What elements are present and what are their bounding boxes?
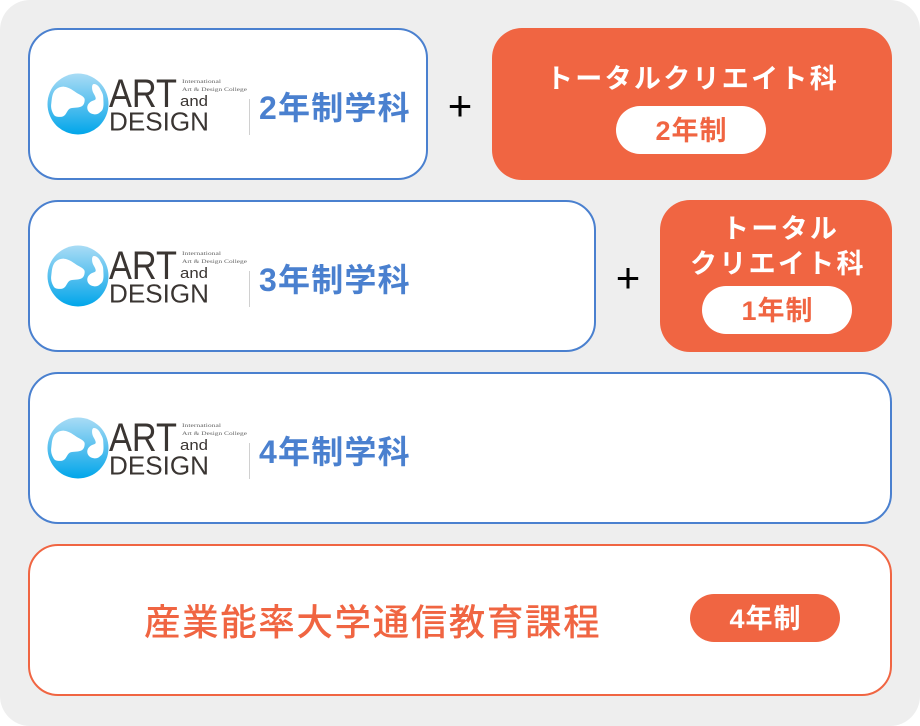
logo: Art and Design, row 1: and (180, 93, 208, 110)
logo: Art and Design, row 2: ART (109, 244, 177, 288)
logo: Art and Design, row 1: Art & Design College (182, 87, 248, 93)
logo: Art and Design, row 2: Art & Design College (182, 259, 248, 265)
plus sign, row 1: + (448, 82, 472, 129)
logo: Art and Design, row 2: International (182, 251, 222, 257)
logo: Art and Design, row 3: DESIGN (109, 450, 209, 480)
logo: Art and Design, row 1: ART (109, 72, 177, 116)
logo: Art and Design, row 2 (48, 244, 250, 308)
heading: total creative course, line 2: クリエイト科 (690, 248, 866, 278)
logo: Art and Design, row 3: and (180, 437, 208, 454)
card: 2-year course (28, 28, 428, 180)
logo: Art and Design, row 2: and (180, 265, 208, 282)
card: 3-year course (28, 200, 596, 352)
logo: Art and Design, row 1: DESIGN (109, 106, 209, 136)
badge: 2 years: 2年制 (655, 116, 728, 146)
logo: Art and Design, row 3: International (182, 423, 222, 429)
badge: 4 years: 4年制 (729, 604, 802, 634)
panel: total creative course, 2 years (492, 28, 892, 180)
badge: 2 years (616, 106, 766, 154)
badge: 1 year (702, 286, 852, 334)
badge: 4 years (690, 594, 840, 642)
logo: Art and Design, row 3: ART (109, 416, 177, 460)
card: 4-year course (28, 372, 892, 524)
logo: Art and Design, row 1: International (182, 79, 222, 85)
label: 2-year course: 2年制学科 (259, 90, 411, 126)
label: 4-year course: 4年制学科 (259, 434, 411, 470)
panel: total creative course, 1 year (660, 200, 892, 352)
plus sign, row 2: + (616, 254, 640, 301)
logo: Art and Design, row 3 (48, 416, 250, 480)
heading: total creative course: トータルクリエイト科 (546, 64, 839, 94)
label: 3-year course: 3年制学科 (259, 262, 411, 298)
panel: correspondence course (28, 544, 892, 696)
logo: Art and Design, row 3: Art & Design College (182, 431, 248, 437)
heading: total creative course, line 1: トータル (722, 214, 839, 244)
heading: SANNO University correspondence course: 産業能率大学通信教育課程 (144, 602, 601, 643)
badge: 1 year: 1年制 (741, 296, 814, 326)
logo: Art and Design, row 2: DESIGN (109, 278, 209, 308)
